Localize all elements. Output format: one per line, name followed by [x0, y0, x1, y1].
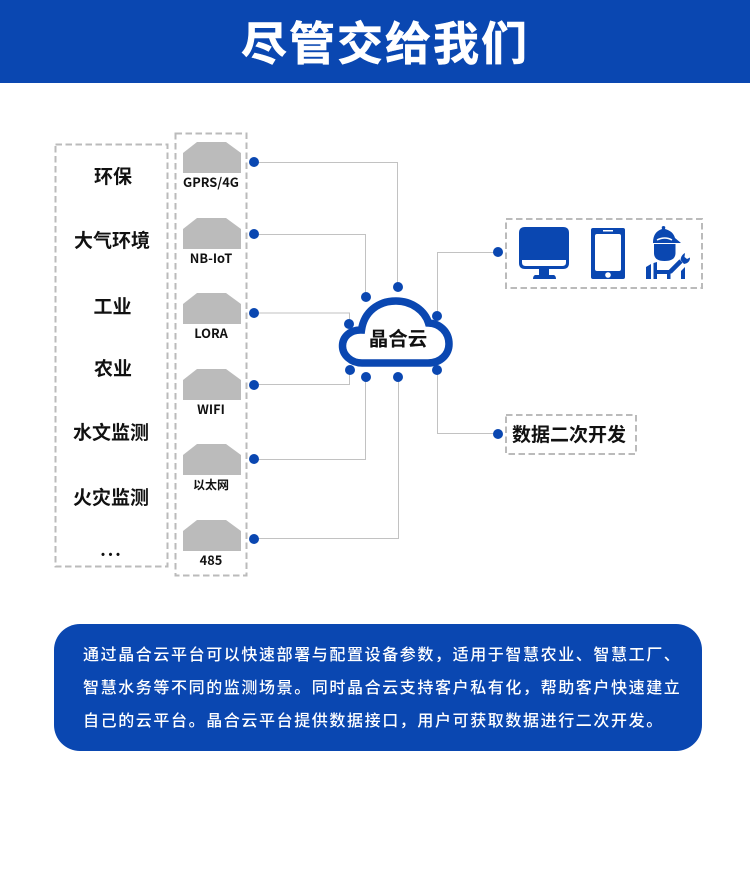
connector lines — [254, 162, 498, 538]
panel: industries: 农业 — [94, 354, 132, 381]
panel: terminals — [506, 219, 702, 288]
icon: monitor — [519, 227, 569, 279]
panel: secondary development — [506, 415, 636, 454]
panel: secondary development: 数据二次开发 — [512, 420, 626, 447]
module: WIFI: WIFI — [197, 399, 225, 418]
panel: industries: 环保 — [94, 162, 132, 189]
module: NB-IoT: NB-IoT — [190, 248, 232, 267]
cloud: platform — [342, 301, 449, 363]
module: Ethernet: 以太网 — [193, 476, 229, 493]
text line 2: 智慧水务等不同的监测场景。同时晶合云支持客户私有化，帮助客户快速建立 — [83, 680, 681, 697]
panel: connectivity options — [176, 134, 246, 576]
panel: industries: 工业 — [93, 292, 132, 319]
cloud: platform: 晶合云 — [369, 322, 427, 352]
panel: industries: ... — [100, 536, 123, 561]
panel: industries — [56, 144, 168, 566]
panel: industries: 火灾监测 — [73, 483, 149, 510]
connector dots — [249, 157, 503, 544]
module: 485 — [183, 520, 241, 569]
module: LORA: LORA — [194, 323, 229, 342]
module: WIFI — [183, 369, 241, 418]
text line 3: 自己的云平台。晶合云平台提供数据接口，用户可获取数据进行二次开发。 — [83, 713, 664, 730]
panel: industries: 大气环境 — [74, 226, 150, 253]
module: Ethernet — [183, 444, 241, 493]
icon: smartphone — [591, 228, 625, 279]
module: 485: 485 — [200, 550, 222, 569]
panel: industries: 水文监测 — [73, 418, 149, 445]
text line 1: 通过晶合云平台可以快速部署与配置设备参数，适用于智慧农业、智慧工厂、 — [83, 647, 681, 664]
title banner — [0, 0, 750, 83]
module: GPRS/4G — [183, 142, 241, 191]
module: LORA — [183, 293, 241, 342]
icon: engineer with wrench — [646, 226, 690, 279]
module: NB-IoT — [183, 218, 241, 267]
description panel — [54, 624, 702, 751]
title banner: 尽管交给我们 — [241, 18, 529, 70]
module: GPRS/4G: GPRS/4G — [183, 172, 239, 191]
